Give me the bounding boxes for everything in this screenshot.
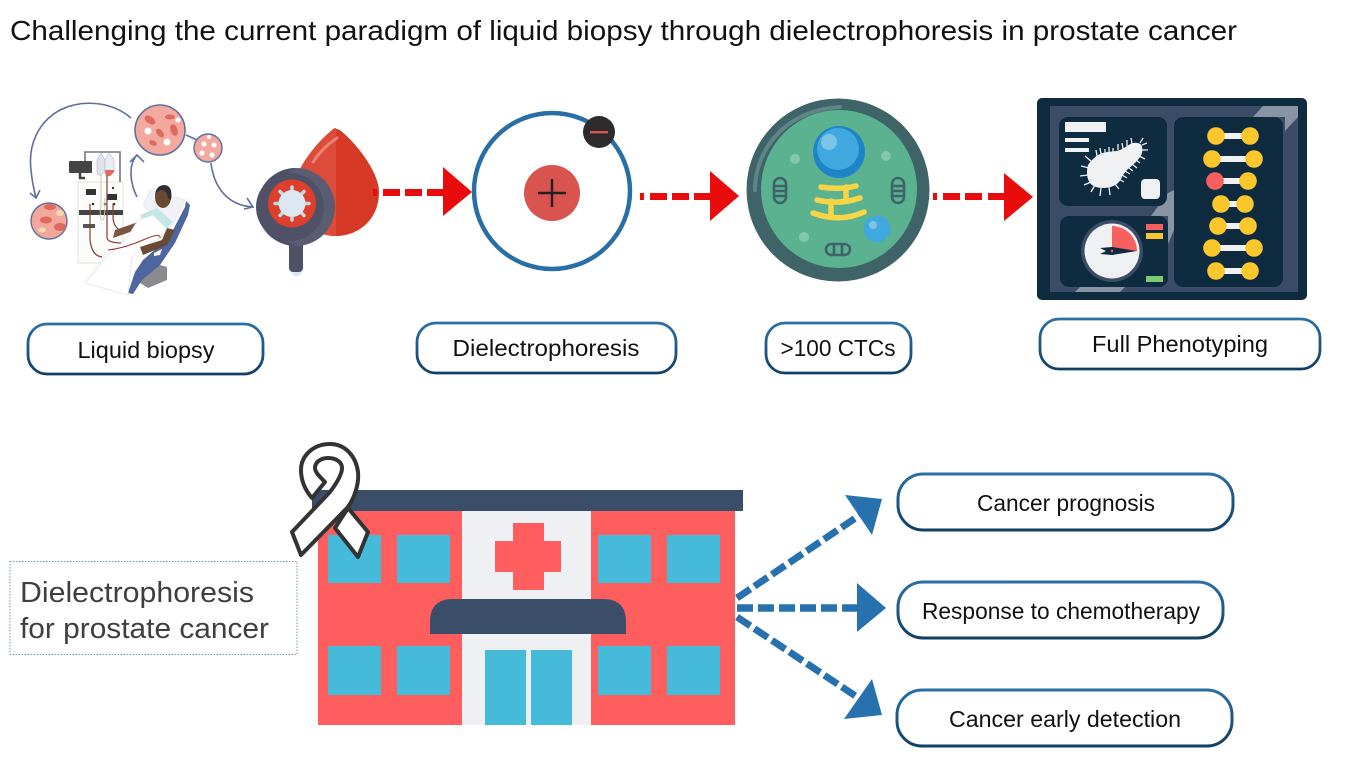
- icon: dielectrophoresis charges: [474, 113, 630, 269]
- icon: hospital: [312, 490, 743, 725]
- icon: blood drop with magnifier: [256, 128, 379, 276]
- doors: [485, 650, 572, 725]
- red cross: [495, 523, 561, 590]
- arrow: CTCs to phenotyping: [933, 173, 1033, 221]
- positive charge: [524, 165, 580, 221]
- blood drop: [293, 129, 379, 236]
- magnifier handle: [289, 235, 303, 276]
- magnifier lens: [256, 168, 335, 246]
- label: Dielectrophoresis: [417, 323, 676, 373]
- arrow: liquid biopsy to dielectrophoresis: [373, 167, 472, 216]
- text box: Dielectrophoresis for prostate cancer: for prostate cancer: [20, 613, 269, 645]
- label: Full Phenotyping: Full Phenotyping: [1092, 331, 1268, 357]
- icon: liquid biopsy patient on dialysis machine: [30, 103, 253, 295]
- gauge panel: [1060, 216, 1168, 287]
- text box: Dielectrophoresis for prostate cancer: Dielectrophoresis: [20, 577, 254, 609]
- label: Response to chemotherapy: Response to chemotherapy: [922, 598, 1200, 624]
- text box: Dielectrophoresis for prostate cancer: [10, 562, 297, 654]
- arrow: to cancer early detection: [737, 617, 882, 719]
- title: Challenging the current paradigm of liquid biopsy through dielectrophoresis in prostate cancer: [10, 15, 1237, 46]
- label: Liquid biopsy: [28, 324, 263, 374]
- negative charge: [583, 116, 615, 148]
- arrow: dielectrophoresis to CTCs: [640, 171, 739, 221]
- windows: [328, 535, 720, 695]
- label: Response to chemotherapy: [898, 582, 1223, 638]
- icon: phenotyping dashboard: [1037, 98, 1307, 300]
- label: Liquid biopsy: Liquid biopsy: [78, 337, 215, 363]
- nucleus: [813, 126, 865, 178]
- circulation arcs: [30, 103, 253, 209]
- arrow: to cancer prognosis: [737, 495, 882, 598]
- large cell circle: [135, 105, 185, 155]
- cell image panel: [1059, 117, 1167, 206]
- label: Dielectrophoresis: Dielectrophoresis: [452, 335, 640, 361]
- label: Cancer prognosis: Cancer prognosis: [977, 490, 1155, 516]
- label: Cancer early detection: Cancer early detection: [949, 706, 1181, 732]
- dialysis machine: [69, 152, 123, 263]
- label: Cancer early detection: [897, 690, 1232, 746]
- left cell circle: [31, 203, 67, 239]
- label: Full Phenotyping: [1040, 319, 1320, 369]
- vesicle: [864, 216, 890, 242]
- label: Cancer prognosis: [898, 474, 1233, 530]
- icon: circulating tumour cell: [746, 98, 930, 282]
- label: >100 CTCs: [766, 323, 911, 373]
- patient in chair: [85, 185, 190, 295]
- small cell circle: [194, 134, 222, 162]
- awning: [430, 599, 626, 634]
- label: >100 CTCs: >100 CTCs: [780, 335, 896, 361]
- icon: awareness ribbon: [292, 444, 368, 557]
- DNA panel: [1174, 117, 1283, 287]
- mitochondria: [774, 178, 904, 255]
- golgi: [813, 186, 864, 218]
- arrow: to response to chemotherapy: [737, 583, 886, 632]
